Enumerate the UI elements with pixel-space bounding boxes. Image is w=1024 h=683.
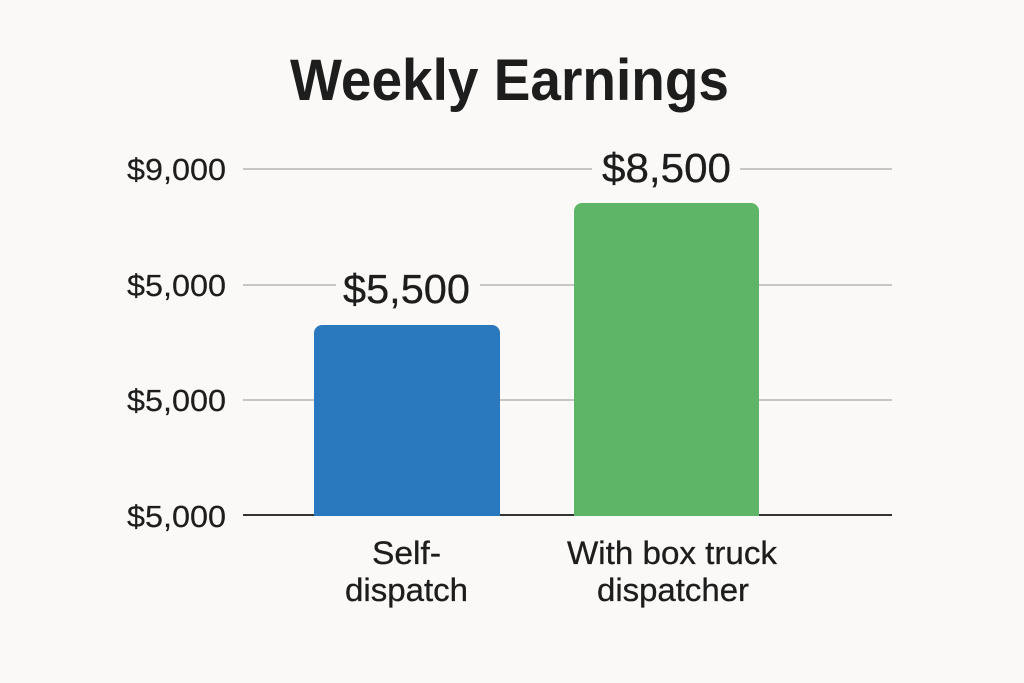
- y axis labels: $5,000: [127, 268, 226, 303]
- y axis labels: [127, 152, 226, 534]
- bar: with box truck dispatcher: [574, 203, 759, 516]
- category label: self-dispatch: [345, 535, 468, 608]
- category label: with box truck dispatcher: [567, 535, 778, 608]
- category label: self-dispatch: Self-: [372, 535, 441, 571]
- category label: with box truck dispatcher: dispatcher: [597, 572, 749, 608]
- value label: self-dispatch: $5,500: [343, 266, 470, 312]
- title: Weekly Earnings: [290, 48, 729, 113]
- category label: with box truck dispatcher: With box truck: [567, 535, 778, 571]
- value label: with dispatcher: $8,500: [602, 145, 731, 191]
- y axis labels: $5,000: [127, 499, 226, 534]
- baseline axis: [243, 514, 892, 516]
- gridlines: [243, 169, 892, 400]
- y axis labels: $5,000: [127, 383, 226, 418]
- bar: self-dispatch: [314, 325, 500, 516]
- category label: self-dispatch: dispatch: [345, 572, 468, 608]
- y axis labels: $9,000: [127, 152, 226, 187]
